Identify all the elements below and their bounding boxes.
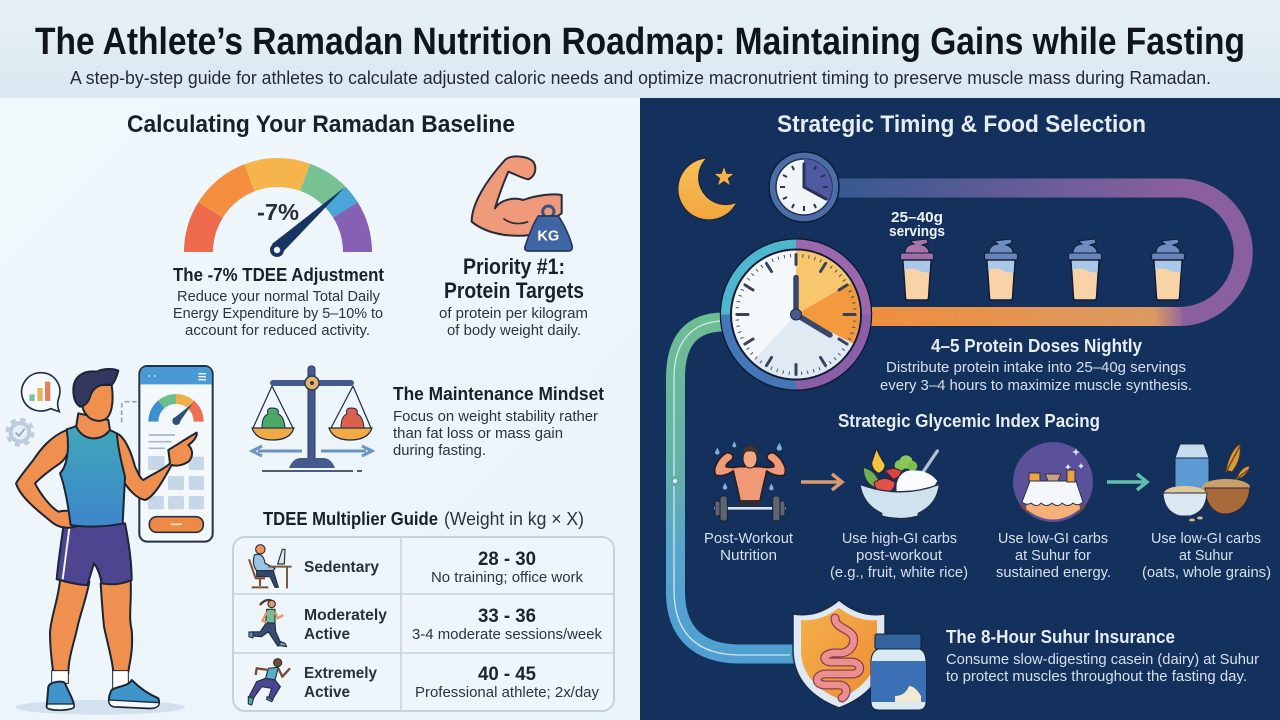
- icon: fruit and rice bowl: [860, 449, 939, 518]
- icon: balance scale: [252, 366, 372, 471]
- icon: milk and whole grains: [1163, 444, 1250, 522]
- icon: flexed arm with kettlebell: [472, 156, 572, 251]
- text block: suhur insurance: Consume slow-digesting casein (dairy) at Suhur: [946, 651, 1259, 668]
- icon: post-workout athlete: [714, 441, 786, 521]
- subtitle: A step-by-step guide for athletes to calculate adjusted caloric needs and optimize macronutrient timing to preserve muscle mass during Ramadan.: [70, 68, 1211, 88]
- table: TDEE multipliers: [233, 537, 614, 711]
- row: sedentary: [249, 545, 583, 588]
- label: serving size: 25–40g: [891, 210, 943, 226]
- arrow: suhur to low-GI: [1107, 474, 1147, 490]
- icon: small clock: [769, 152, 839, 222]
- text block: TDEE adjustment: account for reduced activity.: [185, 322, 370, 339]
- panel: timing background: [640, 98, 1280, 720]
- icon: shield with gut and casein jar: [793, 600, 926, 710]
- text block: TDEE adjustment: Energy Expenditure by 5–10% to: [173, 305, 383, 322]
- text block: TDEE adjustment: [173, 265, 384, 339]
- text block: protein targets: of protein per kilogram: [439, 305, 588, 322]
- row: moderately active: Active: [304, 626, 350, 643]
- row: sedentary: 28 - 30: [478, 549, 536, 570]
- text: high-GI carbs: post-workout: [856, 547, 943, 564]
- text: high-GI carbs: [830, 530, 968, 581]
- gear check: [7, 419, 33, 445]
- text: low-GI carbs grains: (oats, whole grains): [1142, 564, 1271, 581]
- row: moderately active: [249, 600, 602, 647]
- table title: TDEE Multiplier Guide: [263, 509, 438, 529]
- text block: protein doses: every 3–4 hours to maximize muscle synthesis.: [880, 377, 1192, 394]
- phone app: [139, 366, 213, 542]
- text block: protein doses: 4–5 Protein Doses Nightly: [931, 336, 1142, 356]
- text block: protein targets: of body weight daily.: [447, 322, 581, 339]
- shaker 1: [900, 239, 934, 300]
- illustration: athlete with phone: [7, 366, 213, 715]
- icon: suhur night table: [1013, 442, 1093, 522]
- shaker 4: [1152, 239, 1184, 300]
- text: low-GI carbs energy: sustained energy.: [996, 564, 1111, 581]
- heading: timing: Strategic Timing & Food Selection: [777, 111, 1146, 138]
- row: extremely active: [248, 659, 599, 705]
- text block: maintenance mindset: [393, 384, 604, 459]
- shaker 3: [1068, 239, 1102, 300]
- arrow: upper purple timeline path: [838, 188, 1243, 316]
- text: low-GI carbs grains: at Suhur: [1179, 547, 1233, 564]
- text block: protein targets: Protein Targets: [444, 278, 584, 303]
- text: low-GI carbs grains: [1142, 530, 1271, 581]
- row: moderately active: 33 - 36: [478, 606, 536, 627]
- text: low-GI carbs energy: Use low-GI carbs: [998, 530, 1108, 547]
- row: sedentary: No training; office work: [431, 569, 583, 586]
- panel: header band: [0, 0, 1280, 98]
- text block: TDEE adjustment: The -7% TDEE Adjustment: [173, 265, 384, 285]
- arrow: lower orange timeline path: [868, 307, 1182, 326]
- icon: flexed arm with kettlebell: KG: [537, 229, 559, 245]
- speech bubble chart: [22, 373, 60, 412]
- heading: baseline: Calculating Your Ramadan Baseline: [127, 111, 515, 138]
- text block: suhur insurance: to protect muscles throughout the fasting day.: [946, 668, 1247, 685]
- text: low-GI carbs energy: at Suhur for: [1015, 547, 1091, 564]
- text block: TDEE adjustment: Reduce your normal Total Daily: [177, 288, 380, 305]
- connector: [122, 402, 137, 425]
- text block: protein targets: [439, 254, 588, 339]
- row: moderately active: 3-4 moderate sessions/week: [412, 626, 602, 643]
- row: sedentary: Sedentary: [304, 559, 379, 576]
- text: high-GI carbs: Use high-GI carbs: [842, 530, 957, 547]
- text: post-workout nutrition: [704, 530, 794, 564]
- row: extremely active: 40 - 45: [478, 664, 536, 685]
- table title: [263, 509, 584, 529]
- text: post-workout nutrition: Nutrition: [720, 547, 777, 564]
- text block: protein targets: Priority #1:: [463, 254, 565, 279]
- icons: protein shakers: [900, 239, 1184, 300]
- text block: maintenance mindset: Focus on weight stability rather: [393, 408, 598, 425]
- gauge value: -7%: [257, 199, 299, 225]
- shaker 2: [984, 239, 1018, 300]
- label: serving size: servings: [889, 224, 945, 240]
- needle: [270, 187, 345, 257]
- text: post-workout nutrition: Post-Workout: [704, 530, 794, 547]
- heading: glycemic pacing: Strategic Glycemic Index Pacing: [838, 411, 1100, 431]
- panel: baseline background: [0, 98, 640, 720]
- text: high-GI carbs: (e.g., fruit, white rice): [830, 564, 968, 581]
- arrow: green-blue timeline path: [673, 321, 796, 655]
- row: moderately active: Moderately: [304, 607, 387, 624]
- text block: maintenance mindset: The Maintenance Mindset: [393, 384, 604, 404]
- icon: large timing clock: [720, 239, 872, 390]
- icon: crescent moon and star: [678, 158, 737, 220]
- text block: protein doses: [880, 336, 1192, 394]
- row: extremely active: Active: [304, 684, 350, 701]
- chart: TDEE gauge: [184, 158, 372, 257]
- text: low-GI carbs energy: [996, 530, 1111, 581]
- arrow: workout to carbs: [801, 474, 842, 490]
- label: serving size: [889, 210, 945, 240]
- table title: (Weight in kg × X): [444, 509, 584, 529]
- text: low-GI carbs grains: Use low-GI carbs: [1151, 530, 1261, 547]
- text block: suhur insurance: [946, 627, 1259, 685]
- text block: suhur insurance: The 8-Hour Suhur Insurance: [946, 627, 1175, 647]
- row: extremely active: Professional athlete; 2x/day: [415, 684, 599, 701]
- text block: maintenance mindset: during fasting.: [393, 442, 486, 459]
- text block: protein doses: Distribute protein intake into 25–40g servings: [886, 359, 1186, 376]
- text block: maintenance mindset: than fat loss or mass gain: [393, 425, 563, 442]
- row: extremely active: Extremely: [304, 665, 377, 682]
